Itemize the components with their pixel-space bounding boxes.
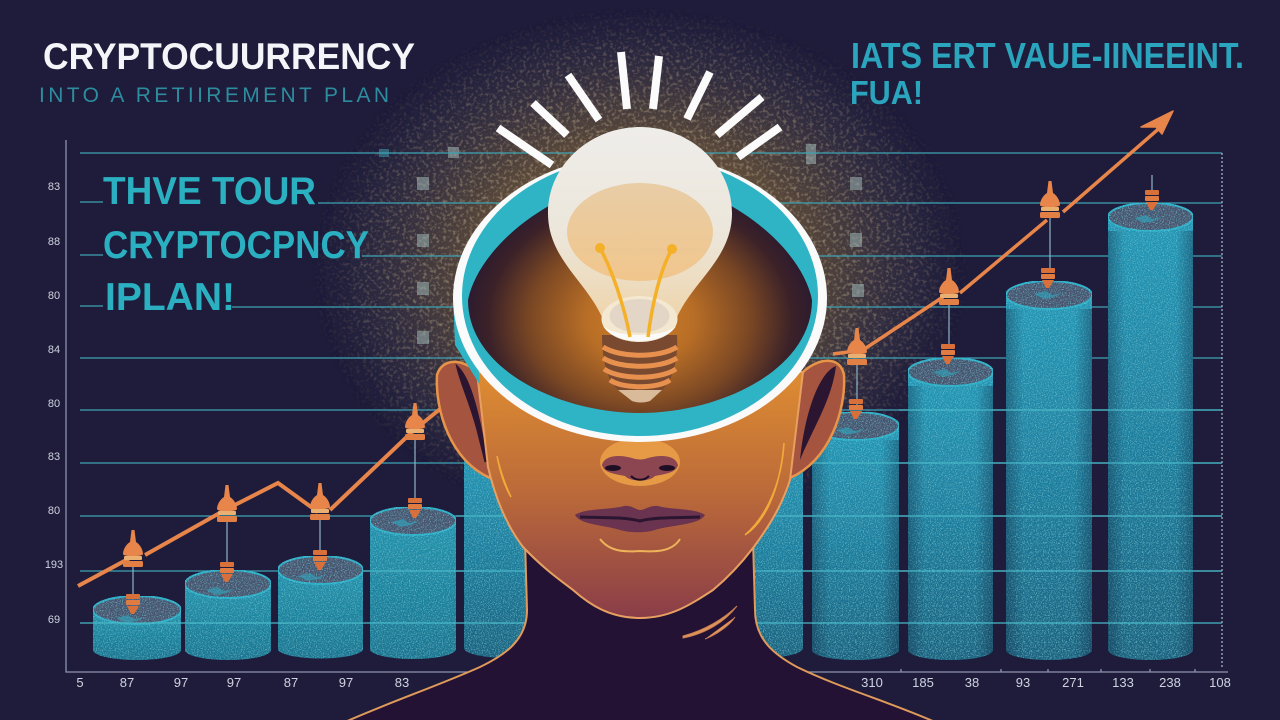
horizontal grid lines [80,153,1222,571]
cylinder 2 [185,570,271,660]
x axis labels: 87 [284,675,298,690]
x axis labels: 83 [395,675,409,690]
coil markers on cylinder tops [126,190,1159,614]
x axis labels: 310 [861,675,883,690]
left ear [437,362,495,478]
right ear [785,361,844,478]
left headline [103,170,369,319]
neck highlight [683,606,737,639]
arrow head [1141,111,1173,134]
subtitle: INTO A RETIIREMENT PLAN [39,84,389,107]
y axis labels: 80 [48,505,60,517]
left headline: IPLAN! [105,276,235,319]
rising trend line left [78,405,445,586]
chart axes [66,140,1228,672]
bulb collar [602,296,678,342]
y axis labels: 88 [48,236,60,248]
x axis labels: 185 [912,675,934,690]
cylinder 1 [93,596,181,660]
y axis labels: 84 [48,344,60,356]
marker stems [133,175,1152,598]
bulb inner glow [567,183,713,281]
cylinder 9 [1108,203,1193,660]
cylinder edge shading and dots [812,231,1193,655]
x axis labels: 97 [227,675,241,690]
faint square markers [379,144,864,344]
cylinder 6 [812,412,899,660]
grid lines over cylinders [80,410,1222,623]
nose [600,438,680,486]
bar chart: cylinders [93,203,1193,660]
light rays [498,52,780,165]
x axis labels: 5 [76,675,84,690]
cylinder 7 [908,358,993,660]
mouth [575,506,705,532]
dark interior of head [468,200,812,413]
y axis labels: 69 [48,614,60,626]
chin line [600,539,680,551]
x axis labels [76,675,1231,690]
face [477,372,803,618]
screw base [602,335,677,402]
x axis labels: 133 [1112,675,1134,690]
background glow behind head [280,0,1000,640]
title: CRYPTOCUURRENCY [43,36,415,77]
filaments [600,248,672,337]
y axis labels: 83 [48,181,60,193]
right headline: IATS ERT VAUE-IINEEINT. [851,35,1244,76]
x axis labels: 108 [1209,675,1231,690]
rising trend line right [833,125,1163,354]
head band teal outer sliver [453,295,480,385]
y axis labels: 193 [45,559,63,571]
x axis labels: 93 [1016,675,1030,690]
x axis labels: 97 [174,675,188,690]
y axis labels: 83 [48,451,60,463]
cylinder 8 [1006,281,1092,660]
head band white rim [453,154,827,442]
x axis labels: 97 [339,675,353,690]
y axis labels: 80 [48,398,60,410]
left headline: CRYPTOCPNCY [103,224,369,267]
left headline: THVE TOUR [103,170,316,213]
x axis labels: 87 [120,675,134,690]
cylinder 5 left of head [464,440,552,658]
neck and shoulders [345,540,935,720]
x axis labels: 238 [1159,675,1181,690]
trend line markers [123,181,1060,567]
y axis labels [45,181,63,626]
right headline [850,35,1244,111]
bulb glass [548,127,732,317]
right headline: FUA! [850,74,923,111]
cylinder 5 right of head [717,440,803,658]
cheek highlights [497,443,784,535]
cylinder 4 [370,507,456,659]
head band teal [462,156,818,436]
light bulb [548,127,732,402]
cylinder cap marks [116,215,1162,623]
y axis labels: 80 [48,290,60,302]
cylinder 3 [278,556,363,658]
head illustration [345,52,935,720]
x axis labels: 38 [965,675,979,690]
x axis labels: 271 [1062,675,1084,690]
